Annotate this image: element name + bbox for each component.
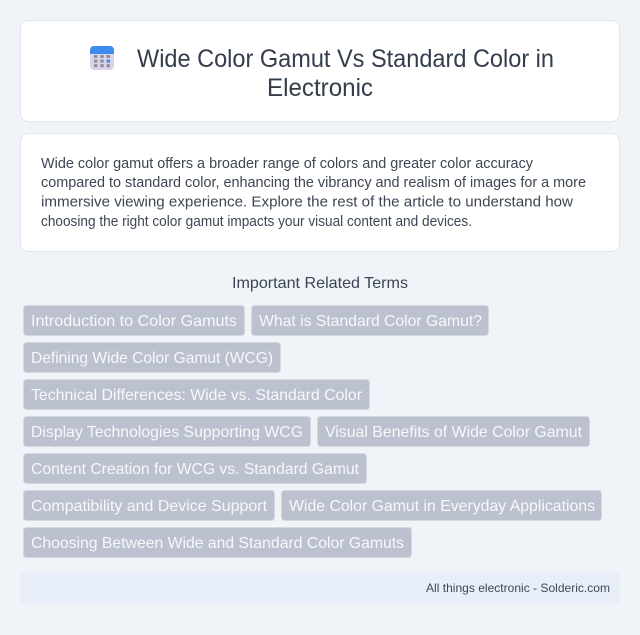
text block: description: choosing the right color gamut impacts your visual content and devices. (41, 214, 472, 230)
tag: Technical Differences: Wide vs. Standard Color (31, 387, 363, 404)
heading: related terms: Important Related Terms (232, 275, 408, 292)
tag (24, 342, 280, 372)
title: Electronic (267, 74, 373, 102)
tag (252, 306, 488, 336)
tag: Compatibility and Device Support (31, 498, 268, 515)
tag (318, 416, 590, 446)
panel: description (20, 134, 620, 252)
tag (24, 380, 370, 410)
tag (24, 454, 366, 484)
tag (282, 490, 602, 520)
tag: Display Technologies Supporting WCG (31, 424, 303, 441)
tag: Defining Wide Color Gamut (WCG) (31, 350, 273, 367)
tag: What is Standard Color Gamut? (259, 313, 482, 330)
text block: description: immersive viewing experience. Explore the rest of the article to understand how (41, 194, 574, 210)
footer text: All things electronic - Solderic.com (426, 581, 610, 595)
tag: Content Creation for WCG vs. Standard Gamut (31, 461, 360, 478)
title: Wide Color Gamut Vs Standard Color in (137, 45, 554, 73)
tag: Choosing Between Wide and Standard Color Gamuts (31, 535, 404, 552)
text block: description: Wide color gamut offers a broader range of colors and greater color accuracy (41, 156, 534, 172)
text block: description: compared to standard color, enhancing the vibrancy and realism of images for a more (41, 175, 586, 191)
tag (24, 528, 412, 558)
tag (24, 490, 274, 520)
tag (24, 306, 244, 336)
tag: Wide Color Gamut in Everyday Applications (289, 498, 595, 515)
tag (24, 416, 310, 446)
tag: Introduction to Color Gamuts (31, 313, 237, 330)
icon: calendar palette (90, 46, 114, 70)
title (137, 45, 554, 102)
tag list (24, 306, 602, 558)
footer (20, 571, 620, 605)
text block: description (41, 156, 586, 230)
tag: Visual Benefits of Wide Color Gamut (325, 424, 583, 441)
panel: title header (20, 20, 620, 122)
